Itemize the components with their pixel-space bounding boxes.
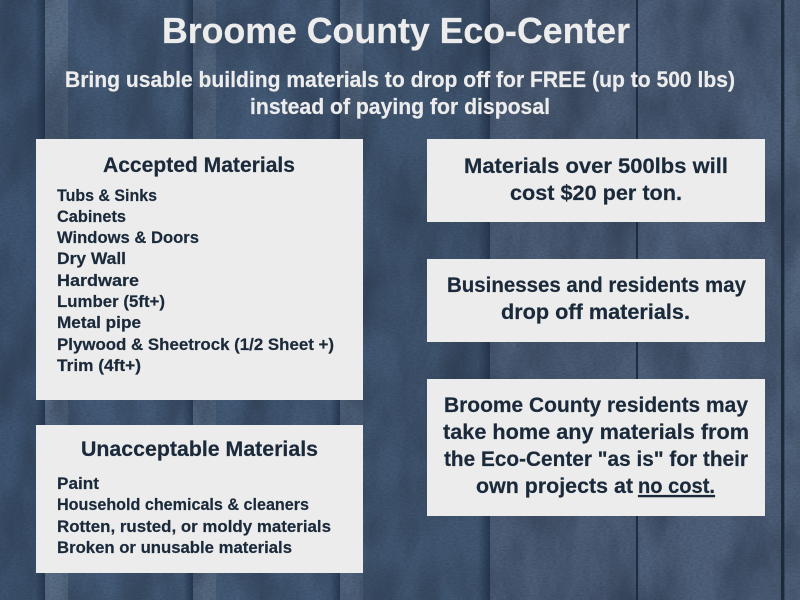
heading: accepted materials: Accepted Materials [103, 154, 295, 177]
list: unacceptable materials: Broken or unusable materials [57, 539, 292, 557]
list: accepted materials: Lumber (5ft+) [57, 293, 165, 311]
list: accepted materials: Metal pipe [57, 314, 141, 332]
panel: who may drop off: drop off materials. [501, 301, 690, 324]
panel: take home materials: no cost. [638, 475, 715, 498]
list: accepted materials: Trim (4ft+) [57, 357, 141, 375]
list: unacceptable materials: Paint [57, 475, 100, 493]
list: accepted materials: Plywood & Sheetrock (1/2 Sheet +) [57, 336, 334, 354]
list: accepted materials [57, 187, 334, 375]
list: unacceptable materials [57, 475, 331, 557]
panel: take home materials [427, 379, 765, 516]
list: accepted materials: Dry Wall [57, 250, 126, 268]
subtitle: instead of paying for disposal [250, 94, 550, 119]
panel: take home materials: the Eco-Center "as is" for their [444, 448, 748, 471]
title: Broome County Eco-Center [162, 10, 630, 51]
panel: cost over 500 lbs [427, 139, 765, 222]
list: accepted materials: Cabinets [57, 208, 126, 226]
heading: unacceptable materials: Unacceptable Materials [81, 438, 318, 461]
subtitle [65, 67, 735, 119]
panel: take home materials: own projects at [476, 475, 633, 498]
list: accepted materials: Windows & Doors [57, 229, 199, 247]
list: unacceptable materials: Rotten, rusted, or moldy materials [57, 518, 331, 536]
list: accepted materials: Hardware [57, 272, 139, 290]
panel: take home materials: Broome County residents may [444, 394, 748, 417]
list: accepted materials: Tubs & Sinks [57, 187, 157, 205]
panel: accepted materials [36, 139, 363, 400]
list: unacceptable materials: Household chemicals & cleaners [57, 496, 309, 514]
subtitle: Bring usable building materials to drop off for FREE (up to 500 lbs) [65, 67, 735, 92]
panel: cost over 500 lbs: Materials over 500lbs will [464, 155, 728, 178]
panel: take home materials: take home any materials from [443, 421, 749, 444]
panel: who may drop off [427, 259, 765, 342]
panel: unacceptable materials [36, 425, 363, 573]
panel: who may drop off: Businesses and residents may [447, 274, 746, 297]
panel: cost over 500 lbs: cost $20 per ton. [510, 182, 682, 205]
